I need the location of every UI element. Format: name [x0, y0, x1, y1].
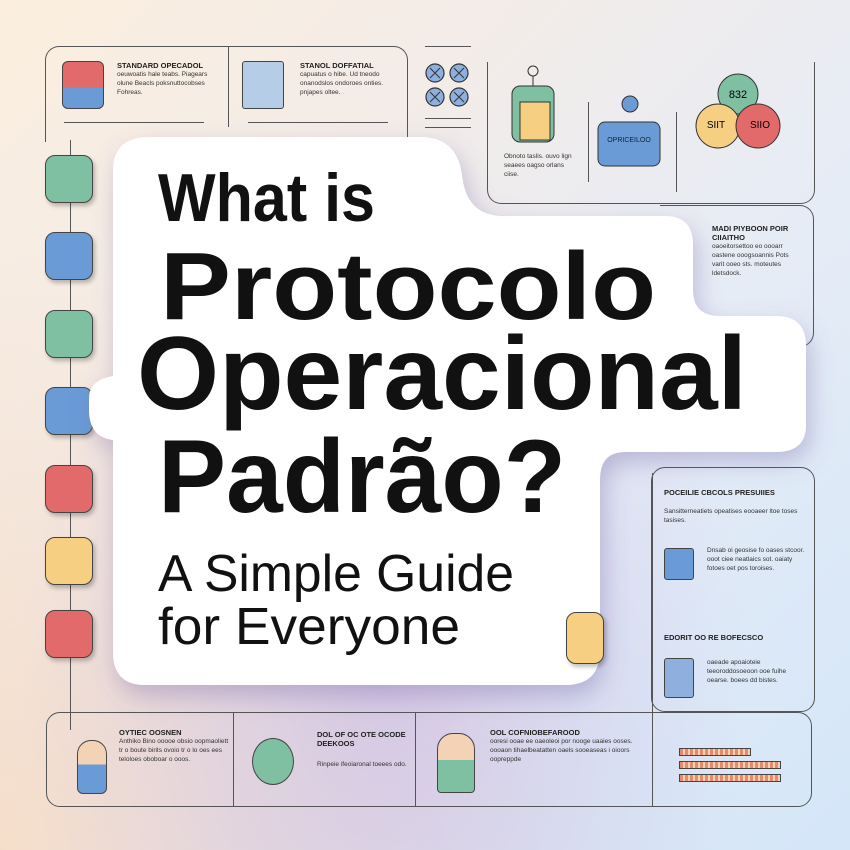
chart: venn circles	[696, 74, 780, 148]
panel: bottom row	[46, 712, 812, 807]
chart: venn circles: SIIO	[750, 120, 770, 131]
panel: right middle: oaeade apoaioteie teeoroddosoeoon ooe fuihe oearse. boees dd bistes.	[707, 659, 786, 684]
title: What is	[158, 160, 375, 236]
card: man	[437, 728, 632, 793]
title: Padrão?	[158, 419, 566, 535]
panel: right middle	[651, 467, 815, 712]
icon: document	[664, 658, 694, 698]
panel: top left cards	[45, 46, 408, 142]
icon: blue badge	[598, 96, 660, 166]
text block: right top: MADI PIYBOON POIR CIIAITHO	[712, 224, 788, 242]
panel: right middle: Dnsab oi geosise fo oases stcoor. ooot ciee neatlaics sot. oaiaty fotoes oet pos toroises.	[707, 547, 804, 572]
card: wrench: DOL OF OC OTE OCODE DEEKOOS	[317, 730, 406, 748]
chart: venn circles: 832	[729, 89, 747, 101]
card: wrench	[252, 730, 407, 785]
card: man: ooresi ooae ee oaeoleoi por nooge uaaies ooses. oooaon tihaelbeatatten oaels sooeaseas i oioors oopreppde	[490, 738, 632, 763]
icon: portrait	[242, 61, 284, 109]
title: Operacional	[137, 316, 747, 432]
text block: stanol: capuatus o hibe. Ud tneodo onanodslos ondoroes onties. pnjapes oltee.	[300, 71, 383, 96]
title	[137, 160, 747, 535]
icon: yellow square	[566, 612, 604, 664]
icon: red-blue card	[62, 61, 104, 109]
card: man: OOL COFNIOBEFAROOD	[490, 728, 580, 737]
text block: Obnoto taslis. ouvo lign seaees oagso orlans ciise.	[504, 153, 572, 178]
icon: person with folder	[512, 66, 554, 142]
title: Protocolo	[160, 233, 656, 340]
panel: right middle: EDORIT OO RE BOFECSCO	[664, 633, 763, 642]
card: person: Anthiko Bino ooooe obsio oopmaoliett tr o boute birits ovoio tr o lo oes ees teloloes oboboar o ooos.	[119, 738, 228, 763]
card: wrench: Rinpeie ifeoiaronal toeees odo.	[317, 761, 407, 768]
main title blob: A Simple Guide	[158, 545, 514, 603]
panel: right middle: POCEILIE CBCOLS PRESUIIES	[664, 488, 775, 497]
main title blob: for Everyone	[158, 598, 460, 656]
card: person: OYTIEC OOSNEN	[119, 728, 182, 737]
icon: blue badge: OPRICEILOO	[607, 137, 651, 144]
panel: right middle: Sansitterneatiets opeatises eooaeer ltoe toses tasises.	[664, 508, 797, 524]
text block: right top	[712, 224, 789, 277]
left vertical line	[70, 140, 71, 730]
card: person	[77, 728, 228, 794]
text block: standard operacional: oeuwoatis hale teabs. Piagears olune Beacls poksnuttocobses Fohreas.	[117, 71, 207, 96]
chart: venn circles: SIIT	[707, 120, 725, 131]
text block: stanol: STANOL DOFFATIAL	[300, 61, 374, 70]
icon column: left	[44, 155, 98, 664]
icon: four x circles	[425, 63, 469, 107]
panel: right side top	[660, 205, 814, 347]
panel: top right diagram	[487, 62, 815, 204]
text block: right top: oaoeitorsettoo eo oooarr oastene ooogsoannis Pots varit ooeo sts. moteutes ldetsdock.	[712, 243, 789, 277]
icon: folder	[664, 548, 694, 580]
text block: standard operacional: STANDARD OPECADOL	[117, 61, 203, 70]
chart: bars	[679, 748, 781, 782]
